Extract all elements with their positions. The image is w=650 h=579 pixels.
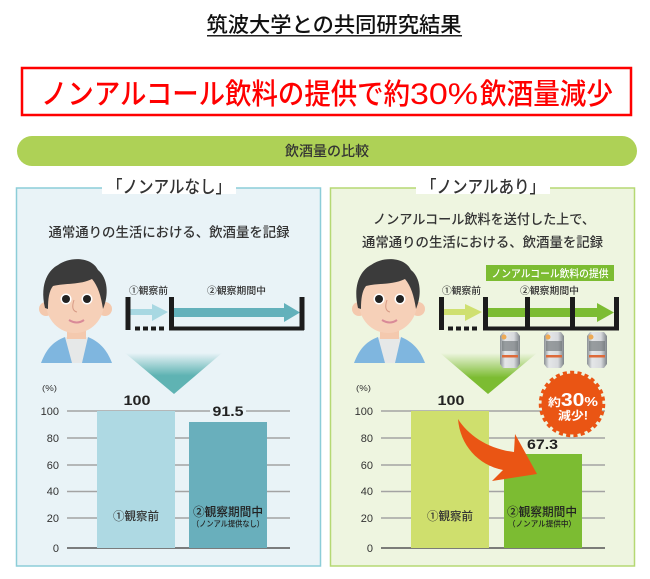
bar chart: with: 67.3 (527, 436, 558, 452)
bar chart: with (355, 383, 605, 555)
bar chart: with: 20 (361, 513, 373, 525)
bar chart: with: （ノンアル提供中） (508, 518, 576, 528)
label: non-alcoholic drink provided: ノンアルコール飲料の提供 (492, 267, 609, 280)
timeline: observation periods: ①観察前 (442, 285, 481, 297)
panel heading: none: 「ノンアルなし」 (107, 177, 231, 197)
bar chart: without: 100 (124, 392, 151, 408)
bar chart: with: 100 (355, 406, 373, 418)
description text: 通常通りの生活における、飲酒量を記録 (362, 235, 604, 250)
bar chart: without: 91.5 (212, 403, 244, 419)
headline callout box: 30% (410, 78, 478, 111)
icon: man (352, 259, 425, 363)
bar chart: with: 40 (361, 486, 373, 498)
bar chart: with: ②観察期間中 (507, 504, 577, 519)
title: 筑波大学との共同研究結果 (206, 14, 462, 37)
description text: 通常通りの生活における、飲酒量を記録 (48, 225, 290, 240)
bar chart: without: 40 (47, 486, 59, 498)
bar chart: with: 80 (361, 433, 373, 445)
timeline: observation periods: ②観察期間中 (207, 284, 266, 297)
badge: about 30% decrease: 約30 % (548, 390, 599, 410)
bar chart: with: 60 (361, 460, 373, 472)
panel: with non-alcoholic drinks (330, 177, 634, 566)
bar chart: without (41, 383, 290, 555)
bar chart: without: ①観察前 (113, 509, 159, 523)
description text (362, 212, 604, 250)
bar chart: without: 0 (53, 543, 59, 555)
timeline: observation periods: ①観察前 (129, 285, 168, 297)
panel: without non-alcoholic drinks (16, 177, 320, 566)
timeline: observation periods (439, 284, 619, 330)
bar chart: without: 60 (47, 460, 59, 472)
timeline: observation periods (126, 284, 304, 330)
bar chart: with: 100 (438, 392, 465, 408)
badge: about 30% decrease (541, 373, 603, 435)
headline callout box (22, 68, 631, 115)
bar chart: with: (%) (356, 383, 371, 393)
bar chart: without: ②観察期間中 (193, 504, 263, 519)
bar chart: with: 0 (367, 543, 373, 555)
timeline: observation periods: ②観察期間中 (520, 284, 579, 297)
description text: ノンアルコール飲料を送付した上で、 (373, 212, 595, 227)
arrow: down triangle (125, 353, 222, 394)
bar chart: without: 100 (41, 406, 59, 418)
arrow: down triangle (440, 353, 537, 394)
headline callout box: 飲酒量減少 (480, 78, 613, 111)
bar chart: without: 20 (47, 513, 59, 525)
section heading pill: 飲酒量の比較 (285, 143, 369, 159)
arrow: orange decrease arrow (458, 419, 537, 481)
badge: about 30% decrease: 減少! (558, 408, 588, 422)
bar chart: without: 80 (47, 433, 59, 445)
bar chart: with: ①観察前 (427, 509, 473, 523)
icon: cans (500, 332, 607, 368)
headline callout box: ノンアルコール飲料の提供で約 (41, 78, 410, 111)
panel heading: provided: 「ノンアルあり」 (421, 177, 545, 197)
bar chart: without: （ノンアル提供なし） (192, 518, 264, 528)
section heading pill (17, 136, 637, 166)
bar chart: without: (%) (42, 383, 57, 393)
icon: man (39, 259, 112, 363)
